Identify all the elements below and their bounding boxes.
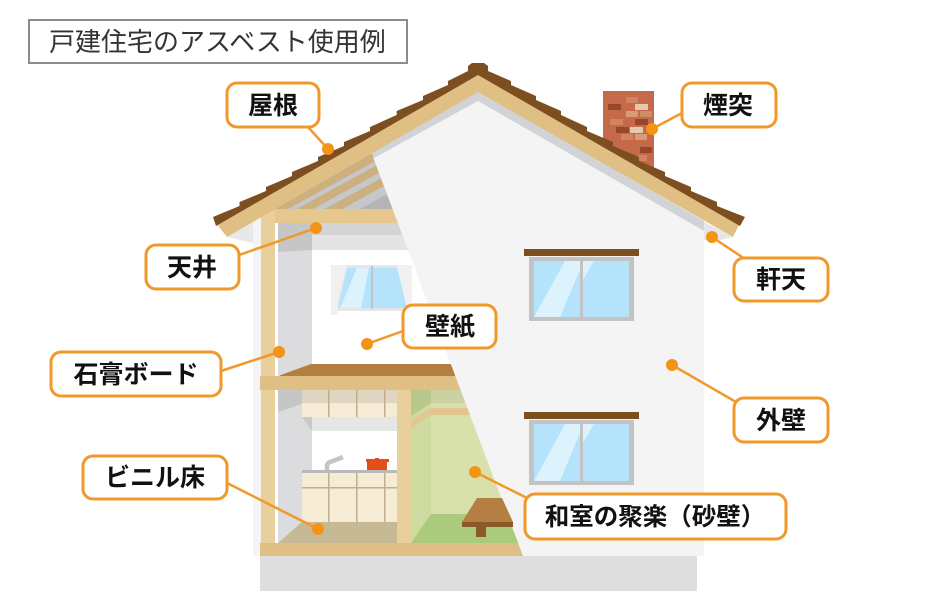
kitchen upper cabinets xyxy=(302,390,397,417)
eave soffits xyxy=(227,222,253,243)
roof tiles xyxy=(213,63,745,226)
callout: 石膏ボード: 石膏ボード xyxy=(73,361,199,389)
chimney xyxy=(603,91,654,171)
callout: 天井 xyxy=(146,222,322,289)
upper room interior xyxy=(275,223,440,383)
ceiling beam xyxy=(262,209,398,223)
second floor beam xyxy=(260,376,465,390)
vinyl floor xyxy=(278,522,397,543)
callout: 屋根: 屋根 xyxy=(248,92,298,120)
upper floor xyxy=(278,364,458,376)
callout: ビニル床: ビニル床 xyxy=(105,464,205,492)
callout: 軒天: 軒天 xyxy=(756,266,806,294)
low table xyxy=(462,498,513,537)
upper right window xyxy=(524,249,639,321)
title xyxy=(29,20,407,63)
callout: 石膏ボード xyxy=(51,346,285,396)
attic rafters xyxy=(276,153,392,209)
kitchen counter and lower cabinets xyxy=(302,470,397,522)
callout: 外壁 xyxy=(666,359,828,442)
callout: 煙突: 煙突 xyxy=(703,92,753,120)
callout: 壁紙: 壁紙 xyxy=(425,313,475,341)
lower room interior xyxy=(275,390,415,542)
callout: 和室の聚楽（砂壁） xyxy=(469,466,786,539)
callout: 煙突 xyxy=(646,83,776,135)
left outer wall strip xyxy=(253,210,262,556)
foundation xyxy=(260,556,697,591)
red pot xyxy=(366,458,389,470)
callout: ビニル床 xyxy=(83,456,324,535)
roof timber xyxy=(216,73,740,237)
lower right window xyxy=(524,412,639,485)
upper window with curtains xyxy=(331,265,412,315)
left post xyxy=(261,209,275,544)
callout: 軒天 xyxy=(706,231,828,301)
washitsu room xyxy=(411,390,520,543)
callout: 天井: 天井 xyxy=(167,254,217,282)
roof underside xyxy=(372,91,704,231)
house illustration xyxy=(213,63,745,591)
title: 戸建住宅のアスベスト使用例 xyxy=(49,27,386,57)
callout: 和室の聚楽（砂壁）: 和室の聚楽（砂壁） xyxy=(545,503,765,531)
kitchen faucet xyxy=(327,457,343,470)
ground floor beam xyxy=(260,543,524,556)
kitchen post xyxy=(397,390,411,543)
callout: 屋根 xyxy=(227,83,334,155)
callout: 壁紙 xyxy=(361,305,496,350)
exterior wall xyxy=(373,101,704,556)
callout: 外壁: 外壁 xyxy=(756,407,806,435)
